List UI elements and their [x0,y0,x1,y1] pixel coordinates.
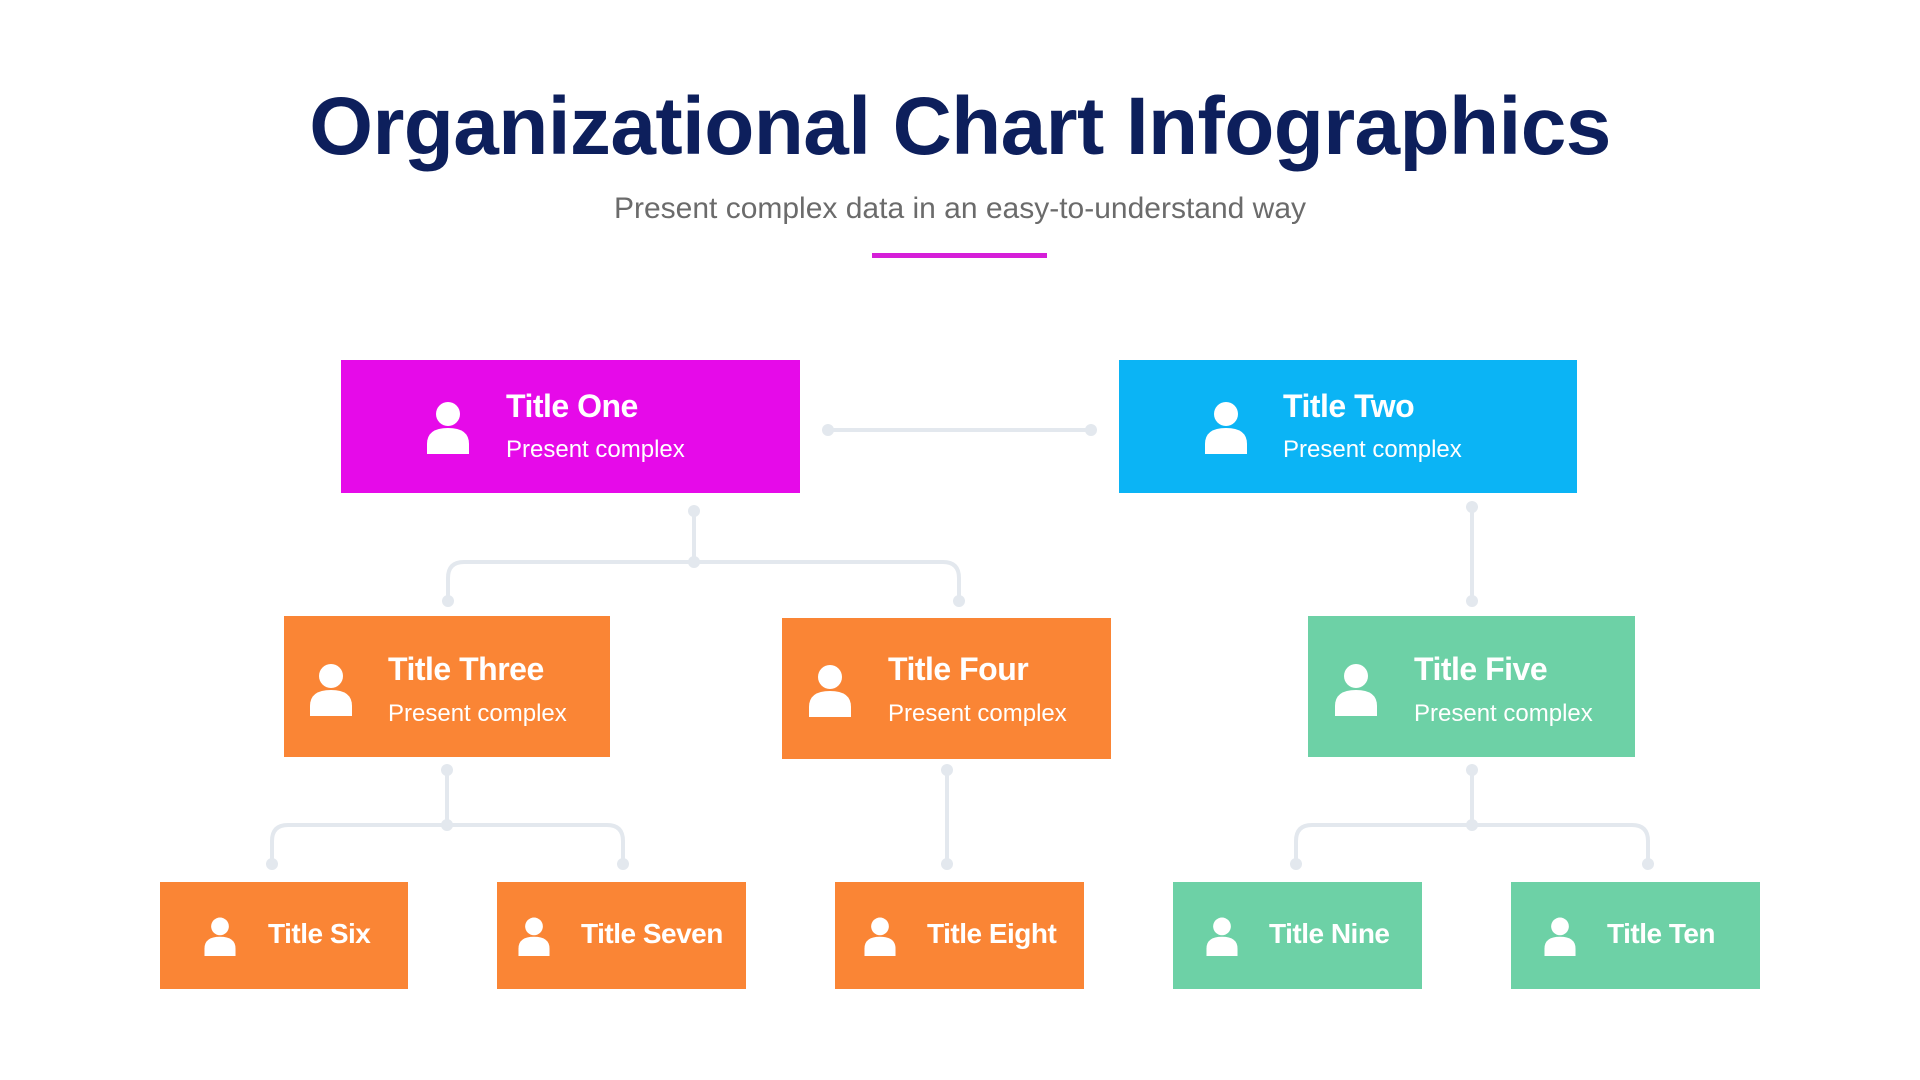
box: Title Six: Title Six [268,918,370,949]
box: Title Six [160,882,408,989]
box: Title One: Title One [506,388,638,424]
box: Title Four: Present complex [888,700,1067,727]
box: Title Two: Present complex [1283,436,1462,463]
icon: person [1205,402,1247,454]
box: Title One: Present complex [506,436,685,463]
box: Title Nine: Title Nine [1269,918,1390,949]
box: Title Five: Present complex [1414,700,1593,727]
icon: person [1206,918,1238,956]
icon: person [864,918,896,956]
title: Organizational Chart Infographics [309,81,1611,172]
box: Title Five: Title Five [1414,651,1547,687]
box: Title Ten: Title Ten [1607,918,1715,949]
box: Title Two: Title Two [1283,388,1414,424]
box: Title Seven [497,882,746,989]
box: Title Seven: Title Seven [581,918,723,949]
box: Title Three: Present complex [388,700,567,727]
icon: person [1335,664,1377,716]
box: Title Four: Title Four [888,651,1028,687]
box: Title Eight [835,882,1084,989]
box: Title One [341,360,800,493]
icon: person [310,664,352,716]
icon: person [518,918,550,956]
subtitle: Present complex data in an easy-to-understand way [614,192,1306,225]
box: Title Ten [1511,882,1760,989]
icon: person [204,918,236,956]
box: Title Five [1308,616,1635,757]
box: Title Four [782,618,1111,759]
box: Title Three [284,616,610,757]
icon: person [809,665,851,717]
accent underline [872,253,1047,258]
icon: person [1544,918,1576,956]
box: Title Nine [1173,882,1422,989]
box: Title Three: Title Three [388,651,544,687]
icon: person [427,402,469,454]
box: Title Eight: Title Eight [927,918,1056,949]
box: Title Two [1119,360,1577,493]
